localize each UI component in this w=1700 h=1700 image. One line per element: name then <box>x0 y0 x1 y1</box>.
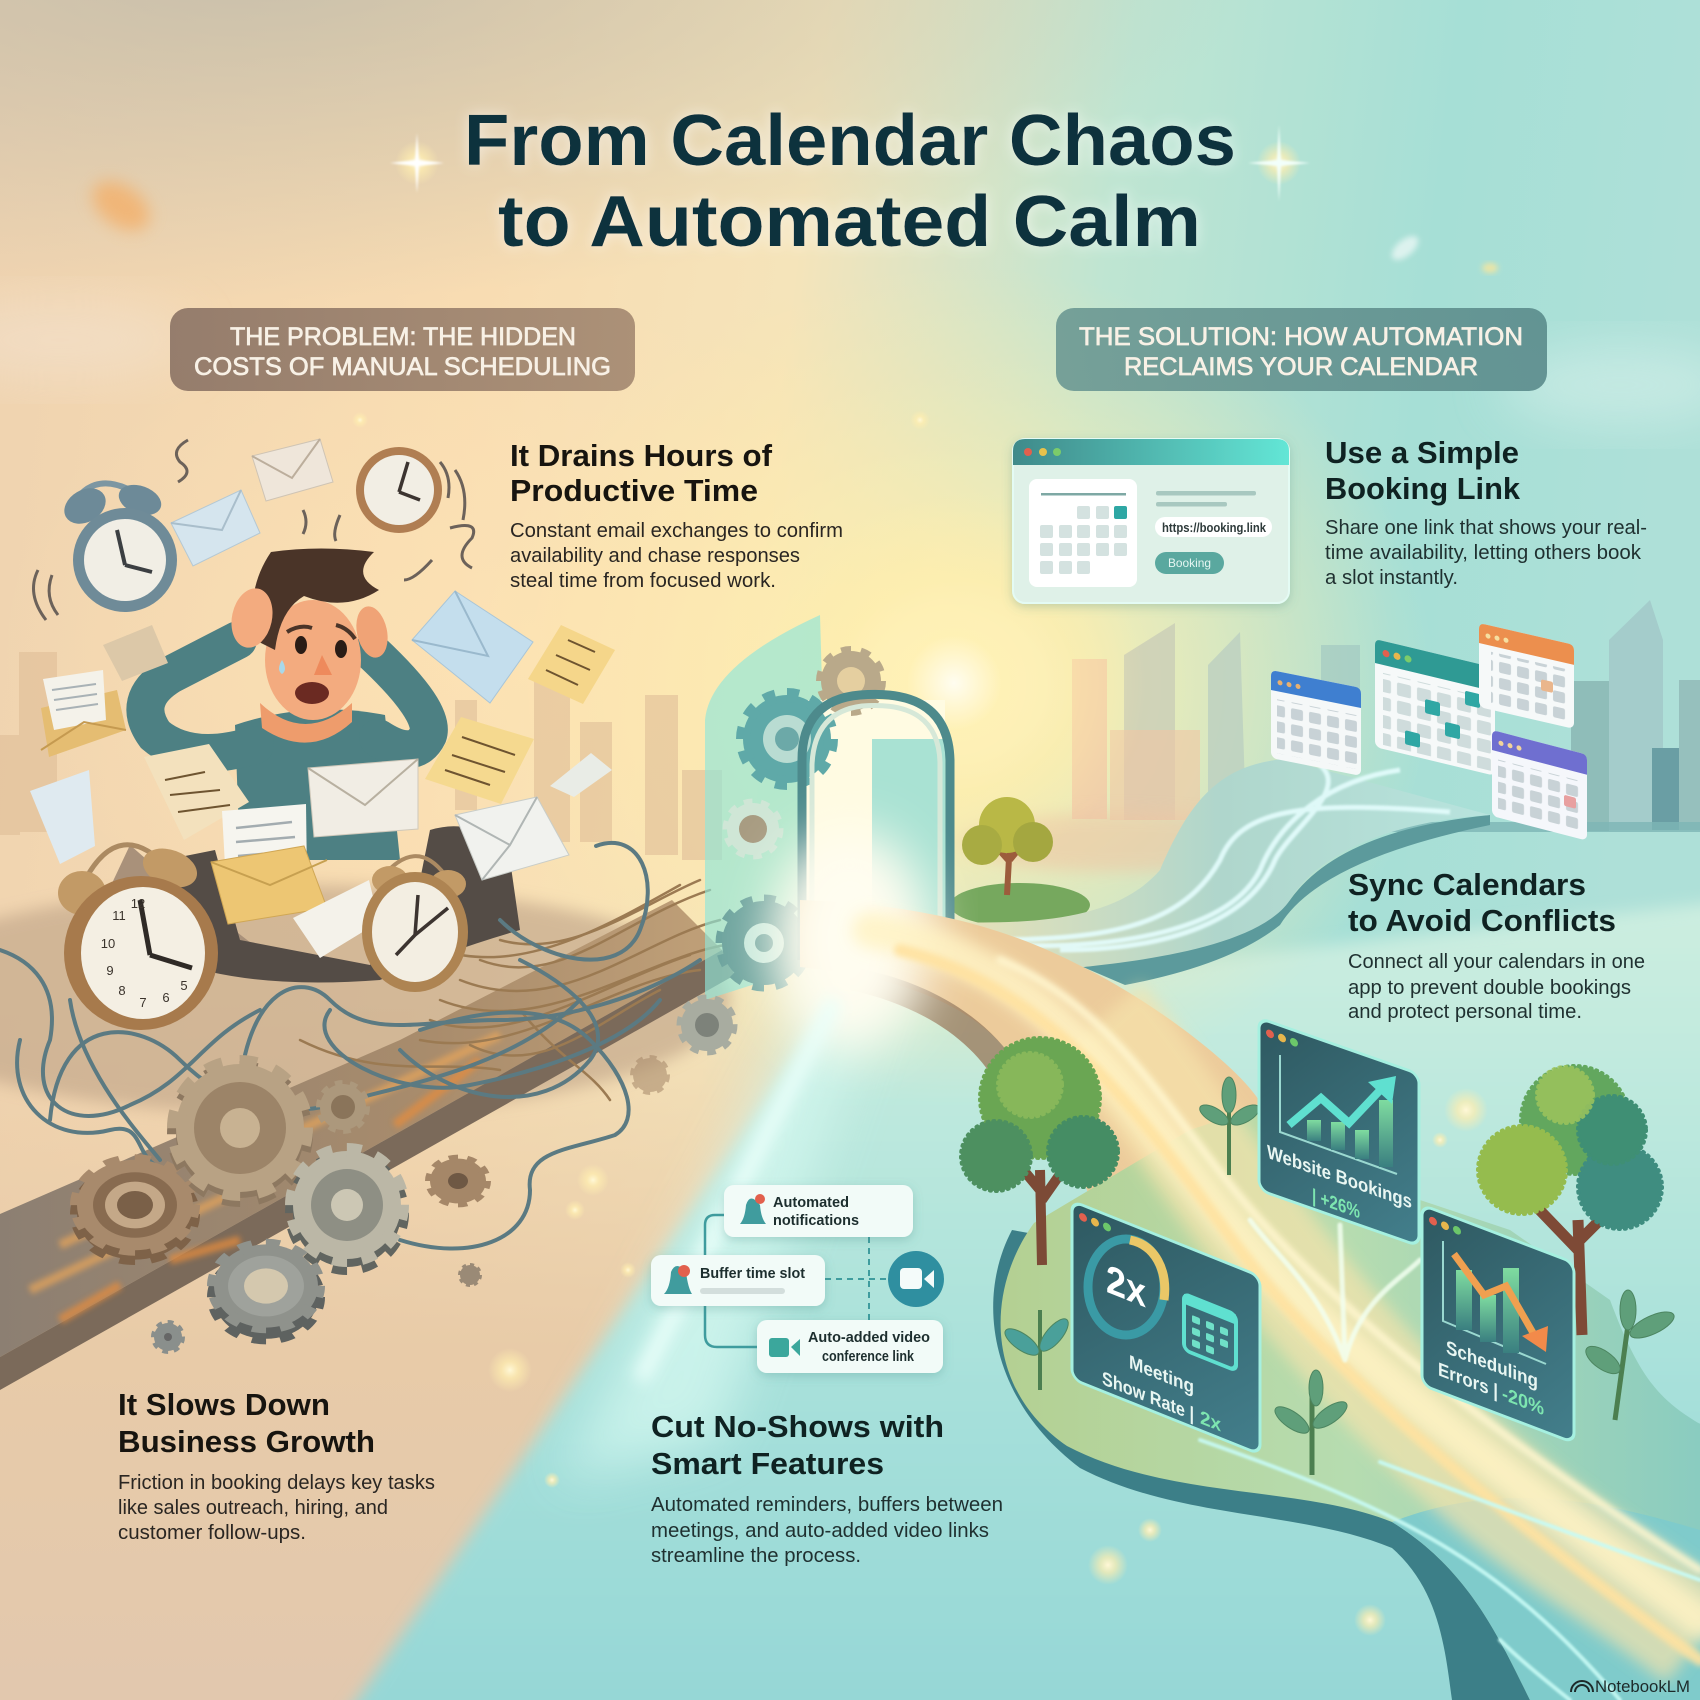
text block: cut no-shows: streamline the process. <box>651 1545 861 1567</box>
gear 8 <box>460 1265 480 1285</box>
heading pill: the solution: THE SOLUTION: HOW AUTOMATION <box>1079 323 1523 351</box>
card panel: Meeting <box>1129 1351 1194 1399</box>
text block: booking link <box>1325 435 1647 589</box>
heading pill: the problem: THE PROBLEM: THE HIDDEN <box>230 323 576 351</box>
clock: wall <box>356 447 442 533</box>
glass door <box>872 739 947 919</box>
gear bronze <box>821 651 881 711</box>
card panel <box>1072 1201 1260 1454</box>
island edge <box>993 1230 1700 1700</box>
card: video link: Auto-added video <box>808 1329 930 1346</box>
card panel <box>1259 1018 1419 1246</box>
calendar: teal <box>1375 639 1495 776</box>
heading pill: the solution: RECLAIMS YOUR CALENDAR <box>1124 353 1478 381</box>
clock: large alarm: 11 <box>112 908 126 923</box>
stress squiggles <box>34 440 474 620</box>
text block: cut no-shows: Automated reminders, buffers between <box>651 1494 1003 1516</box>
text block: booking link: Use a Simple <box>1325 435 1519 470</box>
text block: drains hours <box>510 438 843 592</box>
text block: cut no-shows: Cut No-Shows with <box>651 1409 944 1444</box>
clock: large alarm: 7 <box>139 995 147 1010</box>
gear 1 <box>176 1064 304 1198</box>
card: video link: conference link <box>822 1348 915 1365</box>
clock: large alarm: 8 <box>118 983 126 998</box>
text block: slows growth: Business Growth <box>118 1424 375 1459</box>
automation portal <box>681 615 950 1051</box>
text block: booking link: time availability, letting others book <box>1325 542 1642 564</box>
card panel: Website Bookings <box>1267 1141 1412 1213</box>
text block: booking link: a slot instantly. <box>1325 567 1458 589</box>
heading pill: the solution <box>1056 308 1547 391</box>
text block: sync calendars: to Avoid Conflicts <box>1348 903 1616 938</box>
card: notifications: notifications <box>773 1212 859 1229</box>
tree: right <box>1478 1066 1662 1335</box>
sparkle left <box>390 133 444 193</box>
card: notifications: Automated <box>773 1194 849 1211</box>
browser: booking link <box>1013 439 1289 603</box>
small tree by portal <box>950 797 1090 927</box>
paper notes <box>30 625 615 864</box>
inner light <box>805 700 945 930</box>
tree: left <box>961 1038 1118 1265</box>
person torso <box>235 709 400 860</box>
clock: large alarm: 12 <box>131 896 145 911</box>
gear 7 <box>154 1323 182 1351</box>
person legs <box>165 826 520 982</box>
stat card: meeting show rate <box>1072 1201 1260 1454</box>
text block: cut no-shows: Smart Features <box>651 1446 884 1481</box>
text block: drains hours: It Drains Hours of <box>510 438 773 473</box>
progress ring <box>1088 1239 1165 1335</box>
heading pill: the problem <box>170 308 635 391</box>
glass panel with gears <box>705 615 830 1000</box>
rising chart <box>1280 1055 1397 1174</box>
connector lines <box>705 1215 890 1347</box>
clock: small alarm <box>362 856 468 992</box>
notebooklm watermark: NotebookLM <box>1595 1677 1690 1696</box>
link rows: https://booking.link <box>1162 521 1266 535</box>
stat card: scheduling errors <box>1422 1205 1574 1443</box>
calendar: blue <box>1271 670 1361 776</box>
card panel: 2x <box>1106 1255 1146 1316</box>
text block: slows growth: Friction in booking delays key tasks <box>118 1472 435 1494</box>
text block: booking link: Share one link that shows your real- <box>1325 517 1647 539</box>
calendar card <box>1029 479 1137 587</box>
card panel: 2x <box>1200 1407 1221 1436</box>
clock: grey alarm <box>58 479 177 612</box>
left skyline <box>0 652 722 860</box>
card: notifications <box>724 1185 913 1237</box>
island top <box>1001 1110 1700 1700</box>
gear teal 1 <box>743 695 831 783</box>
sparkle right <box>1248 125 1310 201</box>
gear grey <box>681 999 733 1051</box>
road through island <box>1100 1020 1700 1640</box>
text block: slows growth: like sales outreach, hiring, and <box>118 1497 388 1519</box>
text block: cut no-shows: meetings, and auto-added video links <box>651 1520 989 1542</box>
clock: large alarm: 9 <box>106 963 114 978</box>
card panel: -20% <box>1502 1383 1544 1420</box>
falling chart <box>1443 1241 1548 1364</box>
gear 2 <box>320 1084 366 1130</box>
gear 3 <box>77 1160 193 1260</box>
card panel: Errors | <box>1438 1359 1498 1403</box>
gear 6 <box>430 1159 486 1203</box>
sun glow <box>764 493 1144 873</box>
calendar: orange <box>1479 623 1574 729</box>
clock: large alarm: 10 <box>101 936 115 951</box>
text block: drains hours: Constant email exchanges to confirm <box>510 520 843 542</box>
island with path <box>993 1020 1700 1700</box>
text block: booking link: Booking Link <box>1325 471 1521 506</box>
text block: slows growth <box>118 1387 435 1544</box>
clock: large alarm <box>58 842 218 1030</box>
gear 9 <box>633 1058 667 1092</box>
person head <box>226 548 392 743</box>
text block: slows growth: customer follow-ups. <box>118 1522 306 1544</box>
text block: slows growth: It Slows Down <box>118 1387 330 1422</box>
text block: sync calendars: app to prevent double bookings <box>1348 977 1631 999</box>
ground and debris <box>0 845 735 1390</box>
text block: sync calendars <box>1348 867 1645 1023</box>
card panel: Show Rate | <box>1102 1368 1194 1426</box>
text block: cut no-shows <box>651 1409 1003 1567</box>
text block: drains hours: availability and chase responses <box>510 545 800 567</box>
right skyline <box>960 600 1700 872</box>
light streams <box>870 930 1700 1700</box>
synced calendars <box>1271 623 1587 841</box>
card panel: | +26% <box>1312 1185 1360 1223</box>
smart features diagram <box>651 1185 944 1373</box>
title bar <box>1013 439 1289 465</box>
upper road to calendars <box>953 759 1490 985</box>
stat card: website bookings <box>1259 1018 1419 1246</box>
text block: drains hours: steal time from focused work. <box>510 570 776 592</box>
text block: drains hours: Productive Time <box>510 473 758 508</box>
title <box>464 101 1236 262</box>
arch frame <box>802 694 950 960</box>
floating light particles <box>352 410 1488 1636</box>
gear pale <box>727 803 779 855</box>
cables <box>0 843 725 1249</box>
clock: large alarm: 6 <box>162 990 170 1005</box>
clock: large alarm: 5 <box>180 978 188 993</box>
text block: sync calendars: Connect all your calendars in one <box>1348 951 1645 973</box>
gear teal 2 <box>722 901 806 985</box>
link rows <box>1155 491 1272 574</box>
title: to Automated Calm <box>498 182 1201 262</box>
card: buffer <box>651 1255 825 1306</box>
saplings <box>1001 1077 1678 1475</box>
tail water <box>1392 1498 1700 1700</box>
portal glow <box>640 830 930 1380</box>
window frame <box>1013 439 1289 603</box>
link rows: Booking <box>1168 556 1211 570</box>
calendar: purple <box>1492 730 1587 841</box>
gear 4 <box>293 1151 401 1267</box>
title: From Calendar Chaos <box>464 101 1236 181</box>
text block: sync calendars: Sync Calendars <box>1348 867 1586 902</box>
card panel: Scheduling <box>1446 1337 1538 1393</box>
main road <box>800 900 1400 1350</box>
icon: video camera <box>888 1251 944 1307</box>
text block: sync calendars: and protect personal time. <box>1348 1001 1582 1023</box>
person arms <box>145 640 429 753</box>
card: buffer: Buffer time slot <box>700 1265 805 1282</box>
gears: broken machinery <box>77 1058 667 1351</box>
person overwhelmed <box>145 548 520 982</box>
envelopes <box>41 439 569 958</box>
gear 5 <box>214 1244 318 1339</box>
card panel <box>1422 1205 1574 1443</box>
card: video link <box>757 1320 943 1373</box>
heading pill: the problem: COSTS OF MANUAL SCHEDULING <box>194 353 611 381</box>
